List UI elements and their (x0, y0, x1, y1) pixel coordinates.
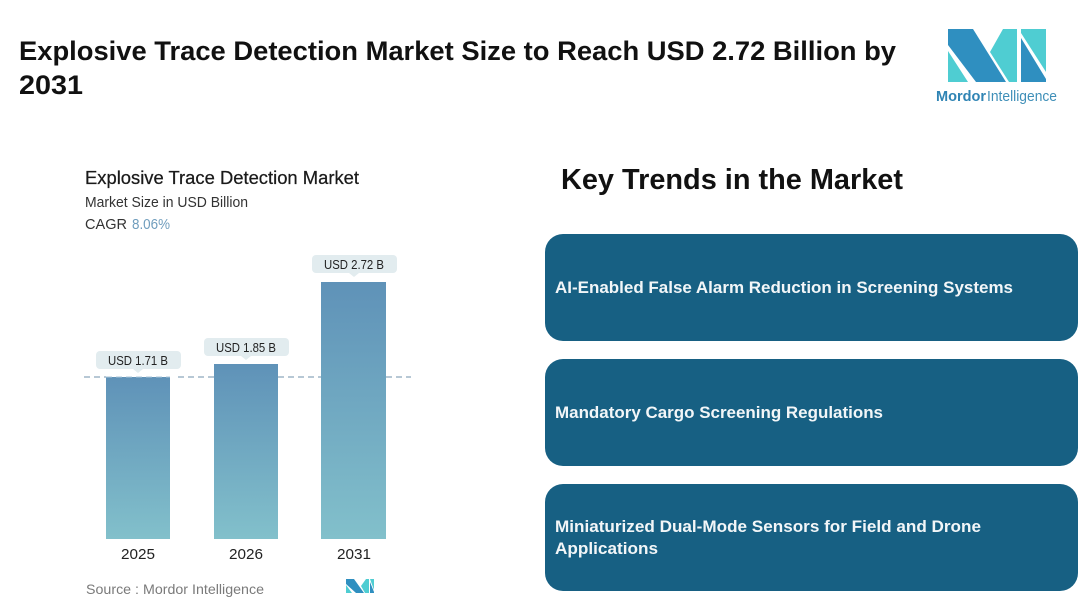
value label 2031: USD 2.72 B (324, 258, 384, 272)
chart heading: Market Size in USD Billion (85, 195, 248, 211)
panel: trend 1 (545, 234, 1078, 341)
x axis labels: 2025 (121, 546, 155, 563)
title: Explosive Trace Detection Market Size to Reach USD 2.72 Billion by (19, 36, 896, 66)
bar 2031 (321, 282, 386, 539)
source: Source : Mordor Intelligence (86, 581, 264, 597)
logo: Mordor Intelligence (936, 29, 1057, 105)
panel: trend 3 (545, 484, 1078, 591)
value label 2031 (312, 255, 397, 277)
icon: small logo (346, 579, 374, 593)
panel: trend 1: AI-Enabled False Alarm Reduction in Screening Systems (555, 279, 1013, 297)
value label 2025 (96, 351, 181, 373)
x axis labels (121, 546, 371, 563)
panel: trend 2: Mandatory Cargo Screening Regulations (555, 404, 883, 422)
chart heading: CAGR (85, 217, 127, 233)
chart heading (85, 168, 359, 233)
bar 2026 (214, 364, 278, 539)
value label 2026 (204, 338, 289, 360)
logo: Mordor Intelligence: Mordor (936, 88, 986, 105)
bar 2025 (106, 377, 170, 539)
heading: key trends: Key Trends in the Market (561, 164, 903, 196)
panel: trend 2 (545, 359, 1078, 466)
logo: Mordor Intelligence: Intelligence (987, 88, 1057, 105)
title: 2031 (19, 70, 83, 100)
title (19, 36, 896, 100)
value label 2025: USD 1.71 B (108, 354, 168, 368)
bar chart (84, 255, 411, 563)
panel: trend 3: Applications (555, 540, 658, 558)
x axis labels: 2031 (337, 546, 371, 563)
chart heading: 8.06% (132, 217, 170, 233)
value label 2026: USD 1.85 B (216, 341, 276, 355)
chart heading: Explosive Trace Detection Market (85, 168, 359, 188)
panel: trend 3: Miniaturized Dual-Mode Sensors for Field and Drone (555, 518, 981, 536)
x axis labels: 2026 (229, 546, 263, 563)
